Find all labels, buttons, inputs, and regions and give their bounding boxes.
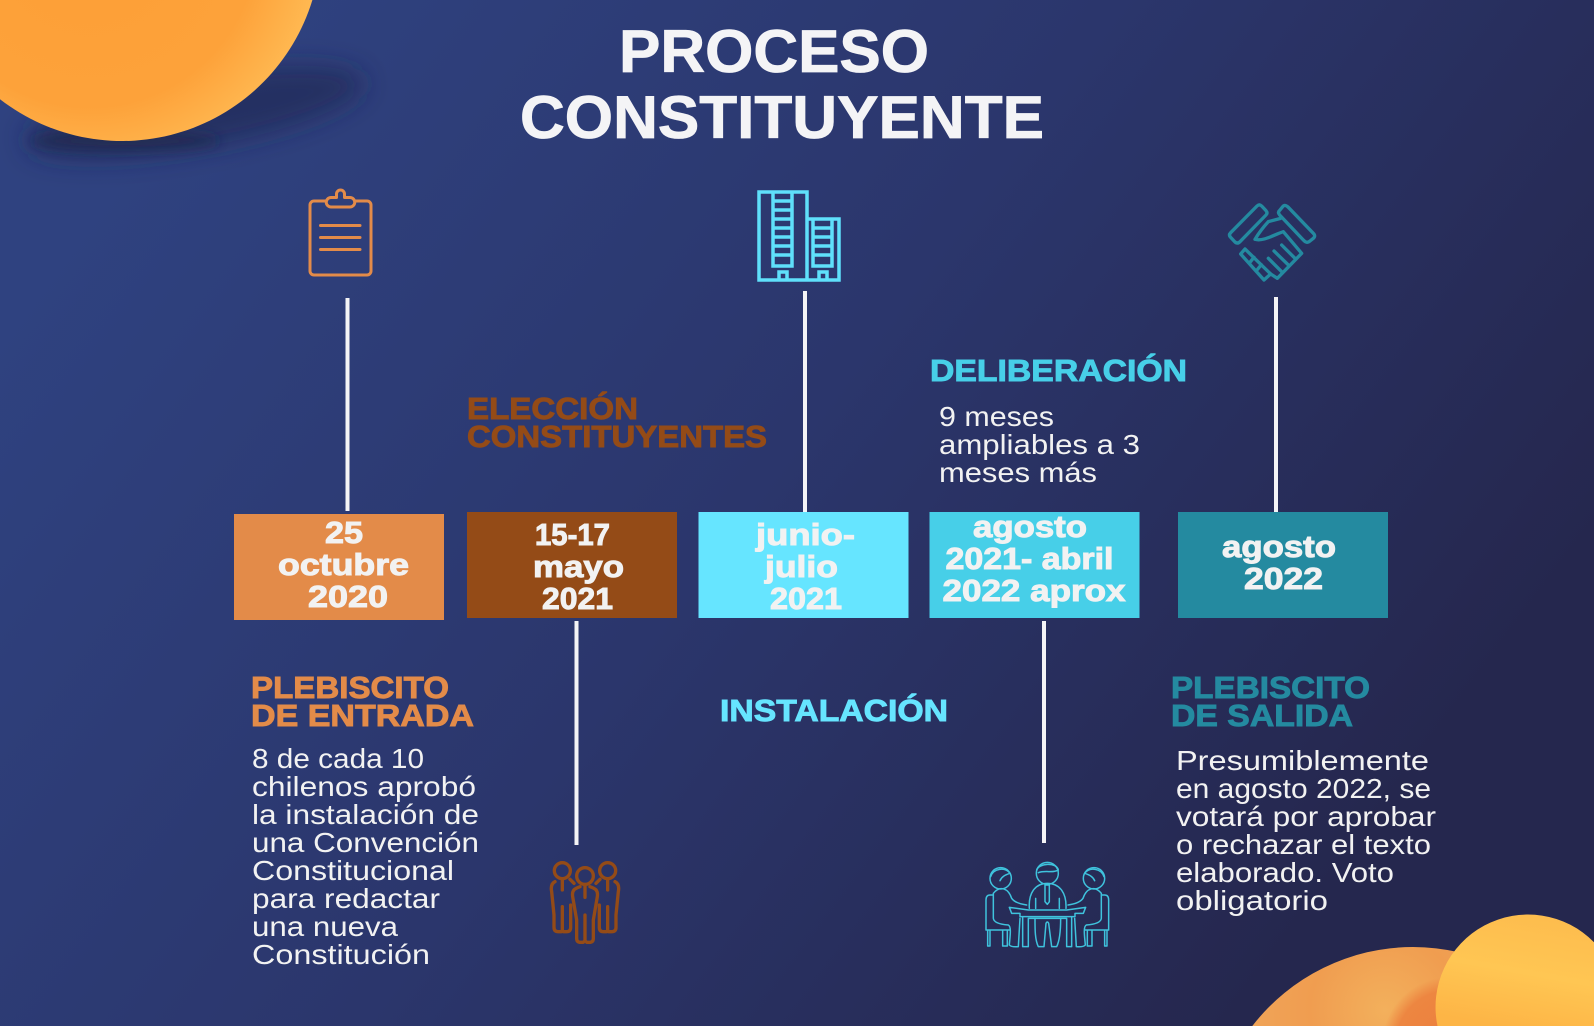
date box: 15-17 mayo 2021 [467, 512, 677, 618]
text block: chilenos aprobó [252, 771, 476, 802]
text block: meses más [939, 457, 1097, 488]
text block: una nueva [252, 911, 398, 942]
text block [1176, 745, 1436, 916]
date box: junio-julio 2021 [698, 512, 908, 618]
text block: Constitución [252, 939, 430, 970]
panel: plebiscito de entrada [251, 670, 479, 970]
title: PROCESO [619, 18, 929, 85]
text block: o rechazar el texto [1176, 829, 1431, 860]
text block: elaborado. Voto [1176, 857, 1394, 888]
title [520, 18, 1044, 151]
connector lines [348, 291, 1276, 845]
date box: 15-17 mayo 2021: 2021 [542, 581, 613, 616]
text block: votará por aprobar [1176, 801, 1436, 832]
icon: buildings [759, 192, 839, 280]
decoration: orange circle with shadow [0, 0, 371, 177]
date box: 25 octubre 2020: 2020 [308, 579, 388, 614]
heading: PLEBISCITO [251, 670, 449, 705]
icon: three people [551, 863, 619, 942]
date box: 25 octubre 2020: 25 [325, 515, 363, 550]
decoration: bottom right orange shapes [1252, 915, 1594, 1026]
text block: obligatorio [1176, 885, 1328, 916]
right person [1068, 868, 1109, 947]
panel: deliberacion [930, 352, 1187, 488]
date box: agosto 2022 [1178, 512, 1388, 618]
heading [1171, 670, 1370, 733]
date box: agosto 2021 - abril 2022 aprox: agosto [973, 509, 1087, 544]
date box: 15-17 mayo 2021: 15-17 [535, 517, 610, 552]
text block: una Convención [252, 827, 479, 858]
date box: junio-julio 2021: junio- [755, 517, 855, 552]
heading: DE SALIDA [1171, 698, 1353, 733]
text block: Presumiblemente [1176, 745, 1429, 776]
date box: junio-julio 2021: julio [764, 549, 838, 584]
title: CONSTITUYENTE [520, 84, 1044, 151]
heading [251, 670, 474, 733]
text block: la instalación de [252, 799, 479, 830]
date box: agosto 2022: 2022 [1244, 561, 1323, 596]
heading: DE ENTRADA [251, 698, 474, 733]
centre person [1029, 862, 1066, 908]
left person [986, 868, 1027, 947]
heading: instalacion: INSTALACIÓN [720, 692, 948, 728]
date box: 15-17 mayo 2021: mayo [533, 549, 624, 584]
icon: handshake [1229, 205, 1315, 280]
icon: people at a table [986, 862, 1109, 947]
date box: agosto 2022: agosto [1222, 529, 1336, 564]
heading: PLEBISCITO [1171, 670, 1370, 705]
text block: en agosto 2022, se [1176, 773, 1431, 804]
icon: clipboard [310, 190, 371, 275]
heading: eleccion constituyentes: CONSTITUYENTES [467, 419, 767, 454]
text block: Constitucional [252, 855, 454, 886]
heading: DELIBERACIÓN [930, 352, 1187, 388]
date box: junio-julio 2021: 2021 [770, 581, 842, 616]
date box: 25 octubre 2020 [234, 514, 444, 620]
date box: agosto 2021 - abril 2022 aprox: 2022 aprox [942, 573, 1126, 608]
date box: agosto 2021 - abril 2022 aprox: 2021- abril [946, 541, 1114, 576]
date box: 25 octubre 2020: octubre [278, 547, 409, 582]
text block: 8 de cada 10 [252, 743, 424, 774]
table [1009, 907, 1086, 947]
text block: 9 meses [939, 401, 1054, 432]
date box: agosto 2021 - abril 2022 aprox [930, 509, 1140, 618]
text block [939, 401, 1140, 488]
text block: para redactar [252, 883, 440, 914]
text block: ampliables a 3 [939, 429, 1140, 460]
panel: plebiscito de salida [1171, 670, 1436, 916]
heading: eleccion constituyentes [467, 390, 767, 454]
text block [252, 743, 479, 970]
heading: eleccion constituyentes: ELECCIÓN [467, 390, 638, 426]
